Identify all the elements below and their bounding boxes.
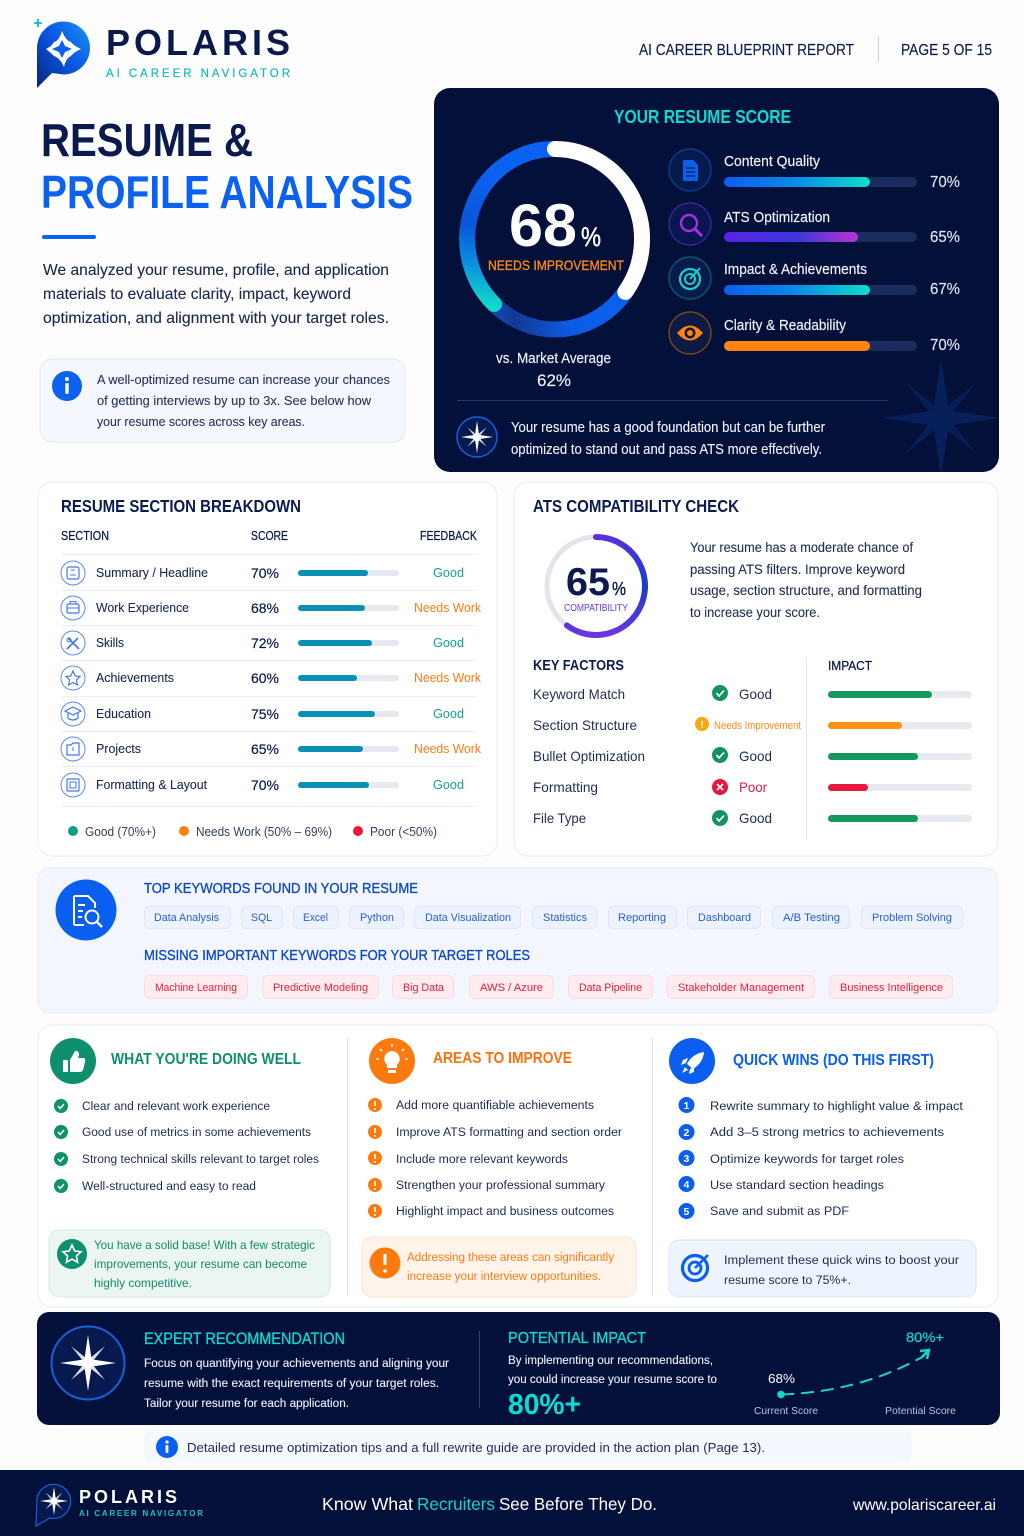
icon: light bulb [369, 1038, 415, 1084]
score summary text: Your resume has a good foundation but can be further [511, 420, 825, 436]
logo tagline: AI CAREER NAVIGATOR [106, 68, 290, 80]
impact heading: IMPACT [828, 658, 872, 673]
recommendation text: resume with the exact requirements of your target roles. [144, 1376, 439, 1390]
intro paragraph: optimization, and alignment with your target roles. [43, 310, 389, 327]
callout: interview opportunities: increase your interview opportunities. [407, 1269, 601, 1283]
found keyword tags: Statistics [543, 912, 587, 924]
metric: clarity and readability: 70% [930, 337, 960, 354]
row: work experience: Work Experience [96, 600, 189, 615]
callout: info box [40, 359, 405, 442]
factor: formatting [533, 779, 972, 795]
row: summary [61, 561, 464, 585]
table header: SECTION [61, 529, 109, 543]
row: education [61, 702, 464, 726]
logo wordmark: POLARIS [106, 22, 290, 63]
legend: Good (70%+) [85, 825, 156, 839]
row: work experience [61, 596, 481, 620]
heading: RESUME SECTION BREAKDOWN [61, 496, 301, 516]
missing keyword tags: Big Data [403, 982, 445, 994]
found keyword tags: Python [360, 912, 394, 924]
missing keyword tags: Stakeholder Management [678, 982, 804, 994]
row: achievements: Achievements [96, 670, 174, 685]
row: skills: Good [433, 635, 464, 650]
footer logo: AI CAREER NAVIGATOR [79, 1509, 203, 1518]
list: improvements: Highlight impact and business outcomes [396, 1204, 614, 1218]
list: quick wins: Rewrite summary to highlight value & impact [710, 1099, 964, 1113]
chart: score projection [754, 1329, 956, 1417]
score gauge: NEEDS IMPROVEMENT [488, 257, 624, 273]
icon: thumbs up [50, 1038, 96, 1084]
found keyword tags: Reporting [618, 912, 666, 924]
legend: Poor (<50%) [370, 825, 437, 839]
icon: info [52, 371, 82, 401]
list: strengths: Clear and relevant work experience [82, 1099, 270, 1113]
row: achievements: 60% [251, 670, 279, 686]
missing keyword tags: Machine Learning [155, 982, 237, 994]
market average: vs. Market Average [496, 351, 611, 367]
header logo [34, 19, 290, 88]
metric: ats optimization: ATS Optimization [724, 210, 830, 226]
list: quick wins: 4 [684, 1179, 690, 1191]
panel: expert recommendation [37, 1312, 1000, 1425]
list: quick wins [678, 1097, 964, 1219]
header report label [639, 36, 992, 62]
recommendation text: Focus on quantifying your achievements and aligning your [144, 1356, 449, 1370]
footer tagline: Know What [322, 1494, 413, 1514]
ats description: passing ATS filters. Improve keyword [690, 561, 905, 577]
callout: boost score: Implement these quick wins to boost your [724, 1253, 959, 1267]
metric: impact and achievements [669, 257, 960, 299]
ats description [690, 539, 922, 620]
row: skills: Skills [96, 635, 124, 650]
callout: interview opportunities [362, 1237, 636, 1297]
table header: SCORE [251, 529, 288, 543]
factor: keyword match [533, 685, 972, 702]
found keyword tags: Problem Solving [872, 912, 952, 924]
factor: bullet optimization: Bullet Optimization [533, 748, 645, 764]
ats gauge: % [612, 579, 626, 599]
intro paragraph [43, 262, 389, 327]
heading: QUICK WINS (DO THIS FIRST) [733, 1052, 934, 1069]
footer website: www.polariscareer.ai [852, 1497, 996, 1514]
missing keyword tags: AWS / Azure [480, 982, 543, 994]
heading: missing keywords: MISSING IMPORTANT KEYWORDS FOR YOUR TARGET ROLES [144, 948, 530, 964]
list: improvements: Strengthen your professional summary [396, 1178, 606, 1192]
found keyword tags: Data Analysis [154, 912, 219, 924]
metric: content quality [669, 149, 960, 191]
found keyword tags: SQL [251, 912, 272, 924]
list: improvements: Add more quantifiable achievements [396, 1098, 594, 1112]
callout: action plan note [144, 1430, 912, 1463]
market average: 62% [537, 371, 571, 390]
row: skills [61, 631, 464, 655]
score gauge: 68 [509, 192, 577, 259]
ats gauge: COMPATIBILITY [564, 603, 628, 614]
row: education: 75% [251, 706, 279, 722]
factor: keyword match: Good [739, 686, 772, 702]
factor: formatting: Poor [739, 779, 767, 795]
callout: interview opportunities: Addressing these areas can significantly [407, 1250, 615, 1264]
metric: content quality: 70% [930, 174, 960, 191]
score gauge: % [581, 222, 601, 252]
header report label: PAGE 5 OF 15 [901, 42, 992, 59]
list: quick wins: 1 [684, 1100, 690, 1112]
list: quick wins: 3 [684, 1153, 690, 1165]
header report label: AI CAREER BLUEPRINT REPORT [639, 42, 854, 59]
callout: solid base: highly competitive. [94, 1276, 192, 1290]
callout text: your resume scores across key areas. [97, 414, 305, 429]
score summary text [511, 420, 825, 458]
callout: boost score: resume score to 75%+. [724, 1273, 851, 1287]
intro paragraph: materials to evaluate clarity, impact, keyword [43, 286, 351, 303]
panel: your resume score [434, 88, 1000, 477]
missing keyword tags: Data Pipeline [579, 982, 642, 994]
metric: impact and achievements: 67% [930, 281, 960, 298]
list: improvements: Improve ATS formatting and section order [396, 1125, 622, 1139]
callout text: A well-optimized resume can increase your chances [97, 372, 390, 387]
heading: WHAT YOU'RE DOING WELL [111, 1051, 301, 1068]
chart: score projection: Current Score [754, 1405, 818, 1417]
list: quick wins: Use standard section headings [710, 1178, 884, 1192]
key factors heading: KEY FACTORS [533, 658, 624, 674]
metric: content quality: Content Quality [724, 154, 821, 170]
ats gauge [547, 537, 645, 635]
factor: section structure: Needs Improvement [714, 720, 801, 732]
chart: score projection: 68% [768, 1371, 795, 1386]
row: achievements: Needs Work [414, 670, 481, 685]
legend [68, 825, 437, 839]
footer [0, 1470, 1024, 1536]
factor: bullet optimization [533, 747, 972, 764]
icon: document search [56, 880, 116, 940]
column: areas to improve [362, 1038, 636, 1297]
metric: clarity and readability: Clarity & Readability [724, 318, 847, 334]
callout: solid base: improvements, your resume can become [94, 1257, 307, 1271]
footer logo: POLARIS [79, 1487, 177, 1507]
footer tagline [322, 1494, 657, 1514]
icon: rocket [669, 1038, 715, 1084]
factor: section structure [533, 717, 972, 733]
row: projects: Needs Work [414, 741, 481, 756]
market average [496, 351, 611, 390]
list: quick wins: 2 [684, 1127, 690, 1139]
heading: ATS COMPATIBILITY CHECK [533, 496, 739, 516]
row: summary: 70% [251, 565, 279, 581]
chart: score projection: Potential Score [885, 1405, 956, 1417]
row: education: Education [96, 706, 151, 721]
found keyword tags: A/B Testing [783, 912, 840, 924]
factor: keyword match: Keyword Match [533, 686, 625, 702]
potential impact: 80%+ [508, 1389, 581, 1421]
row: summary: Good [433, 565, 464, 580]
potential impact: POTENTIAL IMPACT [508, 1330, 646, 1347]
list: quick wins: Save and submit as PDF [710, 1204, 849, 1218]
metric: ats optimization: 65% [930, 229, 960, 246]
missing keyword tags [144, 976, 952, 998]
recommendation text: Tailor your resume for each application. [144, 1396, 349, 1410]
table header [61, 529, 478, 543]
potential impact: By implementing our recommendations, [508, 1353, 713, 1367]
panel: resume section breakdown [38, 482, 497, 856]
icon: watermark compass [882, 359, 1000, 477]
column: doing well [49, 1038, 330, 1297]
callout text [97, 372, 390, 429]
factor: section structure: ! [700, 720, 704, 731]
heading: YOUR RESUME SCORE [614, 106, 791, 127]
found keyword tags [144, 906, 962, 928]
ats description: usage, section structure, and formatting [690, 582, 922, 598]
column: quick wins [669, 1038, 976, 1297]
table header: FEEDBACK [420, 529, 478, 543]
callout text: of getting interviews by up to 3x. See below how [97, 393, 372, 408]
ats description: to increase your score. [690, 604, 820, 620]
panel: keywords [38, 868, 998, 1013]
title: PROFILE ANALYSIS [41, 166, 413, 218]
heading: top keywords: TOP KEYWORDS FOUND IN YOUR RESUME [144, 881, 418, 897]
factor: formatting: Formatting [533, 779, 598, 795]
score gauge [467, 149, 642, 329]
recommendation text [144, 1356, 449, 1410]
row: formatting and layout: Formatting & Layout [96, 777, 207, 792]
row: summary: Summary / Headline [96, 565, 208, 580]
list: improvements [368, 1098, 622, 1218]
ats description: Your resume has a moderate chance of [690, 539, 913, 555]
factor: file type: File Type [533, 810, 586, 826]
footer logo [36, 1484, 203, 1526]
potential impact [508, 1330, 717, 1421]
callout: action plan note: Detailed resume optimization tips and a full rewrite guide are provided in the action plan (Page 13). [187, 1440, 765, 1455]
row: achievements [61, 666, 481, 690]
panel: ats compatibility check [514, 482, 998, 856]
found keyword tags: Excel [303, 912, 328, 924]
list: quick wins: 5 [684, 1206, 690, 1218]
chart: score projection: 80%+ [906, 1329, 944, 1345]
list: strengths: Good use of metrics in some achievements [82, 1125, 311, 1139]
icon: logo pin [34, 19, 90, 88]
title [41, 114, 413, 239]
list: strengths [54, 1099, 319, 1193]
potential impact: you could increase your resume score to [508, 1372, 717, 1386]
missing keyword tags: Business Intelligence [840, 982, 943, 994]
callout: solid base: You have a solid base! With a few strategic [94, 1238, 315, 1252]
ats gauge: 65 [566, 561, 610, 604]
metric: clarity and readability [669, 312, 960, 354]
row: projects: 65% [251, 741, 279, 757]
icon: compass badge [52, 1326, 124, 1400]
footer tagline: Recruiters [417, 1494, 495, 1514]
callout: solid base [49, 1230, 330, 1297]
score summary text: optimized to stand out and pass ATS more effectively. [511, 442, 822, 458]
factor: section structure: Section Structure [533, 717, 637, 733]
row: formatting and layout: Good [433, 777, 464, 792]
factor: bullet optimization: Good [739, 748, 772, 764]
row: skills: 72% [251, 635, 279, 651]
footer tagline: See Before They Do. [499, 1494, 657, 1514]
list: strengths: Strong technical skills relevant to target roles [82, 1152, 319, 1166]
heading: AREAS TO IMPROVE [433, 1050, 572, 1067]
panel: three columns [38, 1025, 998, 1307]
metric: ats optimization [669, 203, 960, 246]
list: quick wins: Add 3–5 strong metrics to achievements [710, 1125, 944, 1139]
found keyword tags: Dashboard [698, 912, 751, 924]
row: formatting and layout [61, 773, 464, 797]
list: quick wins: Optimize keywords for target roles [710, 1152, 904, 1166]
icon: compass [457, 417, 497, 457]
metric: impact and achievements: Impact & Achievements [724, 262, 867, 278]
row: work experience: 68% [251, 600, 279, 616]
callout: boost score [669, 1240, 976, 1297]
row: projects: Projects [96, 741, 141, 756]
list: improvements: Include more relevant keywords [396, 1152, 568, 1166]
list: strengths: Well-structured and easy to read [82, 1179, 256, 1193]
title: RESUME & [41, 114, 253, 166]
row: education: Good [433, 706, 464, 721]
legend: Needs Work (50% – 69%) [196, 825, 332, 839]
found keyword tags: Data Visualization [425, 912, 511, 924]
factor: file type [533, 810, 972, 826]
heading: EXPERT RECOMMENDATION [144, 1330, 345, 1348]
intro paragraph: We analyzed your resume, profile, and application [43, 262, 389, 279]
missing keyword tags: Predictive Modeling [273, 982, 368, 994]
factor: file type: Good [739, 810, 772, 826]
row: projects [61, 737, 481, 761]
row: formatting and layout: 70% [251, 777, 279, 793]
row: work experience: Needs Work [414, 600, 481, 615]
